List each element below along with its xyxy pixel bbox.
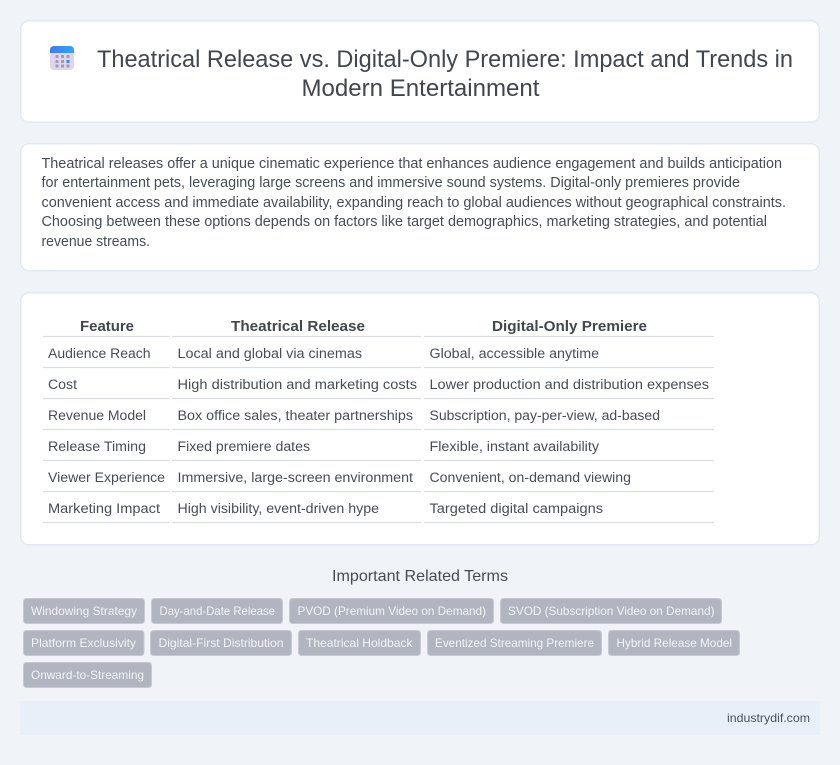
tag: digital-first distribution — [150, 630, 292, 656]
tag: hybrid release model: Hybrid Release Model — [616, 636, 732, 650]
title: Theatrical Release vs. Digital-Only Premiere: Impact and Trends in — [97, 46, 793, 73]
text block: introduction paragraph — [42, 156, 786, 250]
icon: calendar — [50, 46, 74, 70]
text block: introduction paragraph: for entertainment pets, leveraging large screens and immersive sound systems. Digital-only premieres provide — [42, 175, 740, 191]
tag: day-and-date release — [152, 598, 282, 624]
table row: audience reach: Audience Reach — [48, 346, 150, 362]
title: Modern Entertainment — [302, 75, 540, 102]
tag: theatrical holdback — [298, 630, 420, 656]
tag: windowing strategy — [24, 598, 144, 624]
tag: theatrical holdback: Theatrical Holdback — [306, 636, 413, 650]
tag: svod: SVOD (Subscription Video on Demand) — [508, 604, 714, 618]
tag: platform exclusivity — [24, 630, 144, 656]
tag list: related terms — [24, 598, 740, 688]
text block: introduction paragraph: revenue streams. — [42, 234, 150, 250]
table header row: Theatrical Release — [231, 319, 365, 335]
panel: comparison table — [21, 293, 819, 545]
tag: eventized streaming premiere: Eventized Streaming Premiere — [435, 636, 594, 650]
table row: release timing: Release Timing — [48, 439, 146, 455]
text block: introduction paragraph: convenient access and immediate availability, expanding reach to global audiences without geographical constraints. — [42, 195, 786, 211]
tag: onward-to-streaming: Onward-to-Streaming — [31, 668, 144, 682]
table row: cost — [48, 377, 709, 393]
table row: viewer experience: Immersive, large-screen environment — [178, 470, 413, 486]
panel: title header — [21, 21, 819, 122]
table header row: Digital-Only Premiere — [492, 319, 647, 335]
tag: pvod — [290, 598, 494, 624]
table row: viewer experience: Viewer Experience — [48, 470, 165, 486]
tag: eventized streaming premiere — [428, 630, 602, 656]
table row: release timing: Fixed premiere dates — [178, 439, 310, 455]
title — [97, 46, 793, 102]
table row: cost: High distribution and marketing costs — [178, 377, 417, 393]
table row: cost: Cost — [48, 377, 77, 393]
tag: svod — [500, 598, 722, 624]
table row: cost: Lower production and distribution expenses — [430, 377, 709, 393]
table row: marketing impact — [48, 501, 603, 517]
table row: audience reach — [48, 346, 599, 362]
table row: revenue model — [48, 408, 660, 424]
table row: release timing — [48, 439, 600, 455]
text block: introduction paragraph: Choosing between these options depends on factors like target demographics, marketing strategies, and potential — [42, 214, 767, 230]
table row: marketing impact: Marketing Impact — [48, 501, 160, 517]
footer source text: industrydif.com — [727, 711, 810, 725]
panel: introduction — [21, 144, 819, 271]
table row: audience reach: Global, accessible anytime — [430, 346, 599, 362]
tag: digital-first distribution: Digital-First Distribution — [158, 636, 284, 650]
table row: viewer experience: Convenient, on-demand viewing — [430, 470, 631, 486]
tag: day-and-date release: Day-and-Date Release — [160, 604, 275, 618]
table row: marketing impact: High visibility, event-driven hype — [178, 501, 379, 517]
table header row — [80, 319, 647, 335]
table row: revenue model: Box office sales, theater partnerships — [178, 408, 413, 424]
table row: revenue model: Subscription, pay-per-view, ad-based — [430, 408, 660, 424]
tag: onward-to-streaming — [24, 662, 152, 688]
tag: platform exclusivity: Platform Exclusivity — [31, 636, 136, 650]
footer bar — [20, 701, 820, 735]
table row: release timing: Flexible, instant availability — [430, 439, 600, 455]
table row: marketing impact: Targeted digital campaigns — [430, 501, 603, 517]
table row: viewer experience — [48, 470, 631, 486]
heading: important related terms: Important Related Terms — [332, 568, 508, 585]
text block: introduction paragraph: Theatrical releases offer a unique cinematic experience that enhances audience engagement and builds anticipation — [42, 156, 782, 172]
table row: revenue model: Revenue Model — [48, 408, 146, 424]
tag: hybrid release model — [608, 630, 740, 656]
table header row: Feature — [80, 319, 134, 335]
tag: pvod: PVOD (Premium Video on Demand) — [298, 604, 486, 618]
tag: windowing strategy: Windowing Strategy — [31, 604, 137, 618]
table row: audience reach: Local and global via cinemas — [178, 346, 362, 362]
